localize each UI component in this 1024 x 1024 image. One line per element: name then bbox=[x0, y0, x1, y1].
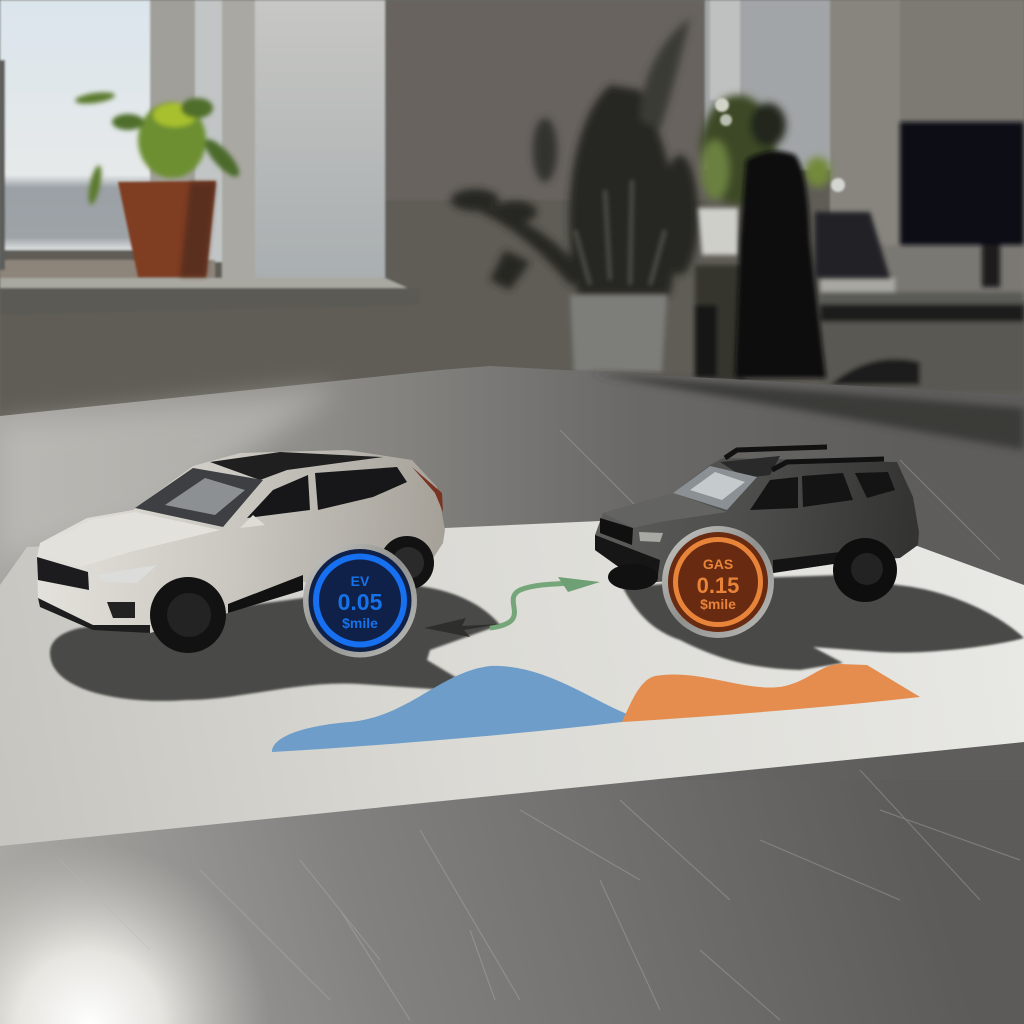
side windows bbox=[750, 472, 895, 510]
EV cost badge: $mile bbox=[342, 615, 378, 631]
gas cost badge: $mile bbox=[700, 596, 736, 612]
dark gas toy car bbox=[595, 447, 919, 602]
area chart: EV blue bbox=[272, 666, 632, 752]
icon: computer monitor bbox=[815, 122, 1024, 287]
roof bbox=[210, 452, 383, 480]
white EV toy car bbox=[37, 450, 445, 653]
gas cost badge bbox=[662, 526, 774, 638]
table surface bbox=[0, 366, 1024, 1024]
mirror bbox=[240, 515, 265, 528]
plant pot bbox=[570, 295, 667, 372]
wheels bbox=[150, 577, 226, 653]
EV cost badge: 0.05 bbox=[338, 589, 383, 615]
grille bbox=[600, 518, 633, 545]
paper sheet bbox=[0, 521, 1024, 846]
roof rack bbox=[725, 447, 884, 470]
desk and legs bbox=[695, 245, 1024, 392]
side windows bbox=[247, 467, 407, 518]
car shadows bbox=[50, 575, 1024, 701]
arrow: green trend arrow between badges bbox=[424, 577, 600, 637]
roof bbox=[720, 456, 780, 478]
windshield bbox=[135, 468, 263, 527]
icon: shelf plant bbox=[698, 95, 845, 255]
windshield bbox=[673, 466, 757, 510]
EV cost badge: EV bbox=[351, 573, 370, 589]
gas cost badge: GAS bbox=[703, 556, 733, 572]
hood bbox=[603, 493, 727, 528]
hood highlight bbox=[92, 512, 220, 562]
gas cost badge: 0.15 bbox=[697, 573, 739, 598]
icon: office chair bbox=[735, 151, 826, 378]
background wall and window bbox=[0, 0, 1024, 420]
wheels bbox=[608, 564, 658, 590]
area chart: gas orange bbox=[622, 664, 920, 722]
EV cost badge bbox=[303, 544, 417, 658]
icon: large background plant bbox=[451, 18, 698, 372]
grille and light bbox=[37, 557, 89, 590]
icon: window plant bbox=[74, 90, 244, 277]
